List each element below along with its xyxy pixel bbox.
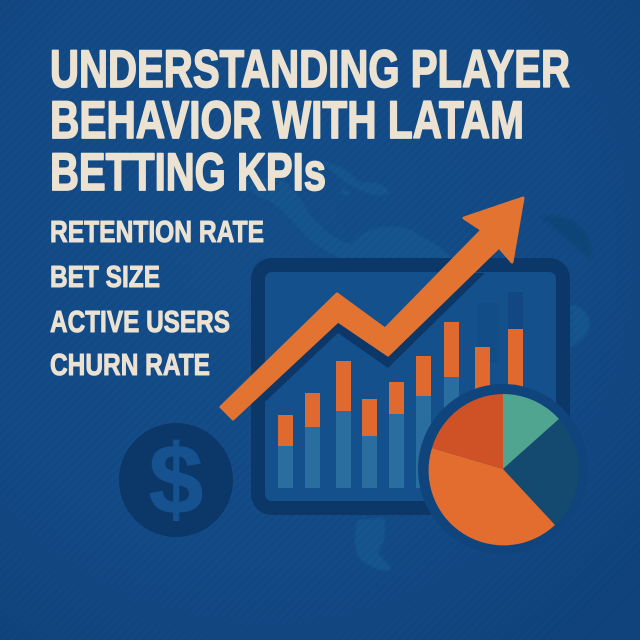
bar 4 <box>362 399 377 488</box>
KPI: retention rate: RETENTION RATE <box>50 214 264 249</box>
KPI: churn rate: CHURN RATE <box>50 347 210 382</box>
KPI: active users: ACTIVE USERS <box>50 304 230 339</box>
bar 9 <box>508 329 523 389</box>
background map of Latin America <box>247 160 590 570</box>
ghost bars <box>477 292 523 363</box>
slice: red <box>432 394 503 469</box>
slice: dark teal <box>503 419 579 525</box>
pie chart <box>418 384 588 554</box>
title <box>50 40 570 202</box>
dark map patch <box>540 215 592 260</box>
chart monitor frame <box>258 265 563 508</box>
bar chart <box>278 292 523 488</box>
KPI: bet size: BET SIZE <box>50 259 160 294</box>
trend arrow <box>221 198 523 419</box>
pie ring <box>418 384 588 554</box>
arrow shadow <box>265 273 484 402</box>
icon: dollar coin <box>119 423 233 537</box>
slice: large orange <box>429 448 555 545</box>
bar 8 <box>475 347 490 397</box>
KPI list <box>50 214 264 382</box>
bar 1 <box>278 415 293 488</box>
icon: dollar coin: $ <box>149 424 203 534</box>
bar 7 <box>444 322 459 427</box>
bar 2 <box>305 393 320 488</box>
bar 3 <box>336 361 351 488</box>
slice: teal <box>503 394 559 469</box>
title: BETTING KPIs <box>50 143 326 202</box>
bar 5 <box>389 382 404 488</box>
bar 6 <box>416 356 431 488</box>
